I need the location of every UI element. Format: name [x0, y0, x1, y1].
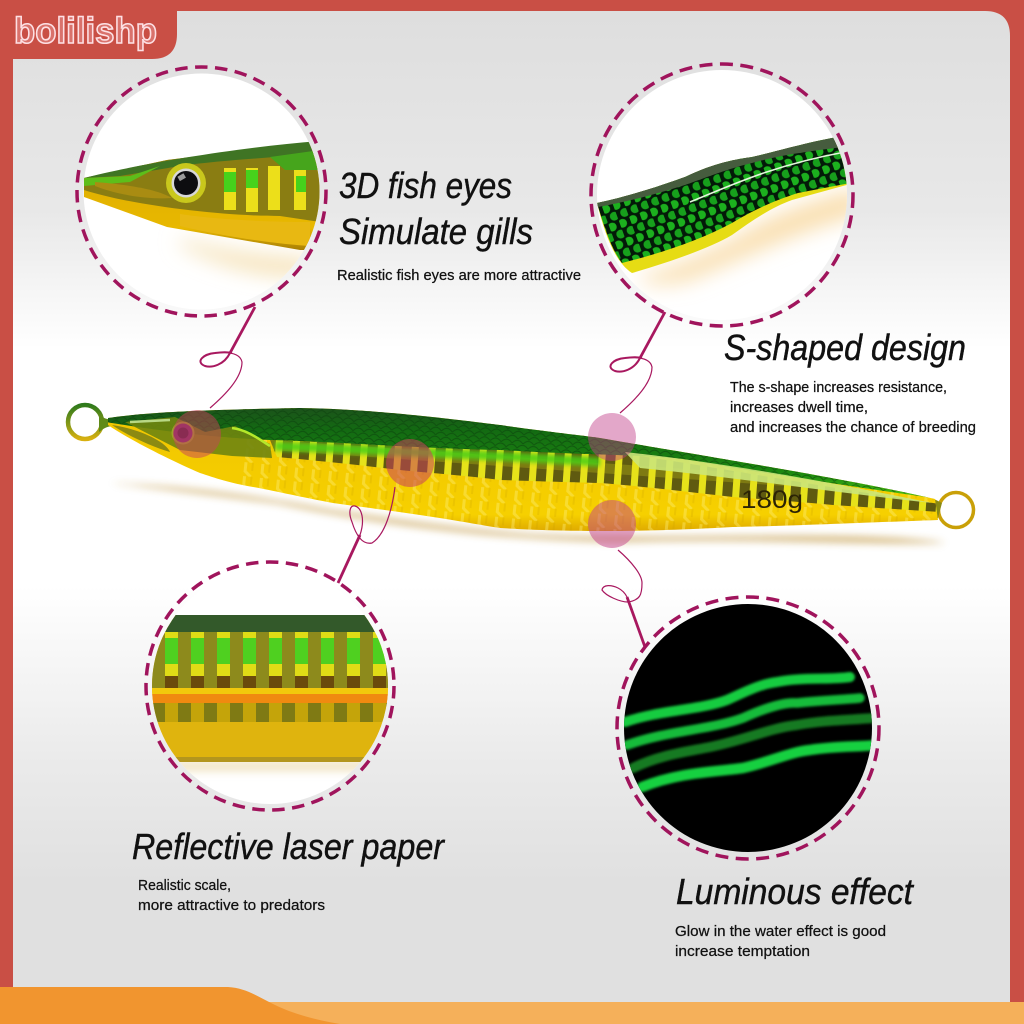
text: laser paper description: more attractive to predators: [138, 897, 325, 914]
text: laser paper description: [138, 877, 325, 914]
heading: Reflective laser paper: Reflective laser paper: [132, 826, 446, 867]
bottom orange band: [0, 987, 1024, 1024]
connector: luminous: [602, 550, 645, 647]
connector: s-shape: [610, 312, 665, 413]
stripe band: [270, 440, 940, 512]
brand logo tab: bolilishp: [14, 10, 157, 51]
heading: Luminous effect: Luminous effect: [676, 871, 915, 912]
text: s-shape description: The s-shape increases resistance,: [730, 379, 947, 396]
connector: laser paper: [338, 487, 395, 583]
dashed ring: [146, 562, 394, 810]
panel: luminous effect circle: [617, 597, 880, 859]
panel: S-shape detail circle: [591, 64, 860, 326]
front ring: [68, 405, 114, 439]
text: laser paper description: Realistic scale,: [138, 877, 231, 894]
text: s-shape description: increases dwell time,: [730, 399, 868, 416]
head detail: [112, 425, 170, 452]
panel: fish eye detail circle: [77, 67, 326, 316]
pale highlight toward tail: [625, 452, 932, 503]
text: luminous description: Glow in the water effect is good: [675, 923, 886, 940]
text: s-shape description: and increases the chance of breeding: [730, 419, 976, 436]
180g weight label: 180g: [741, 486, 803, 514]
main lure product photo: [68, 400, 974, 543]
panel: reflective laser paper circle: [140, 562, 400, 810]
heading: Simulate gills: Simulate gills: [339, 211, 533, 252]
dashed ring: [77, 67, 326, 316]
bright glow along stripes: [275, 446, 600, 462]
3D eye: [166, 163, 206, 203]
text: luminous description: [675, 923, 886, 960]
lure shadow: [110, 483, 945, 543]
green back: [108, 408, 928, 498]
connector: fish eyes: [200, 307, 255, 408]
tail ring: [934, 492, 974, 528]
text: fish eyes description: Realistic fish eyes are more attractive: [337, 267, 581, 284]
hotspot dots on lure: [173, 410, 636, 548]
dashed ring: [591, 64, 853, 326]
dashed ring: [617, 597, 879, 859]
lure eye: [172, 422, 194, 444]
heading: S-shaped design: S-shaped design: [724, 327, 966, 368]
heading: 3D fish eyes: 3D fish eyes: [339, 165, 512, 206]
text: s-shape description: [730, 379, 976, 436]
text: luminous description: increase temptation: [675, 943, 810, 960]
lure body: [108, 408, 938, 531]
